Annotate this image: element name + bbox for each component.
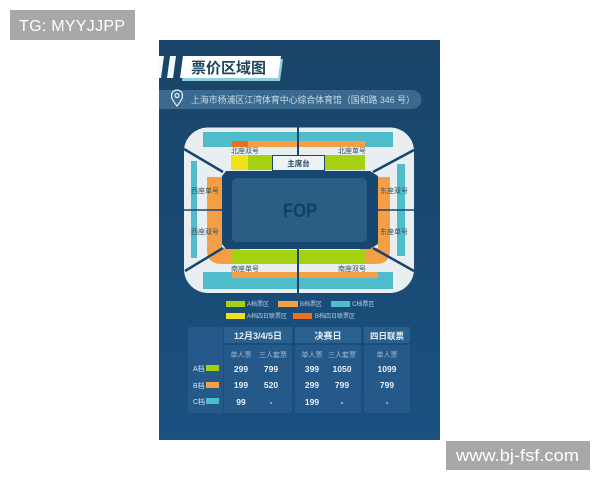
section labels: 西座双号 (191, 227, 219, 236)
legend: C档票区 (352, 300, 374, 308)
section labels: 西座单号 (191, 186, 219, 195)
main stand: 主席台 (287, 158, 310, 168)
column: tier labels (188, 327, 223, 413)
watermark: top left (10, 10, 135, 40)
zone: B tier north (248, 141, 365, 147)
column: 四日联票: 单人票 (376, 350, 398, 359)
column: 四日联票 (364, 327, 410, 413)
title banner: 票价区域图 (191, 60, 266, 77)
column: 12月3/4/5日: 12月3/4/5日 (234, 331, 282, 341)
column: 四日联票: - (386, 397, 389, 407)
zone: A tier north right (325, 155, 365, 170)
column: tier labels: B档 (193, 381, 205, 390)
column: 决赛日: 单人票 (302, 350, 322, 359)
column: 决赛日: 299 (305, 380, 319, 390)
column: 12月3/4/5日: 99 (236, 397, 246, 407)
price table (188, 327, 410, 413)
watermark: bottom right: www.bj-fsf.com (455, 446, 579, 465)
field of play (232, 178, 367, 242)
column: 决赛日: - (341, 397, 344, 407)
column: 四日联票: 四日联票 (370, 331, 404, 341)
inner bowl (222, 171, 378, 249)
legend: A档票区 (247, 300, 269, 308)
section labels: 东座单号 (380, 227, 408, 236)
title banner (159, 56, 283, 81)
legend: B档票区 (300, 300, 322, 308)
legend (226, 300, 374, 320)
zone: four-day A yellow (231, 155, 248, 170)
watermark: bottom right (446, 441, 590, 470)
section labels: 东座双号 (380, 186, 408, 195)
section labels: 南座双号 (338, 264, 366, 273)
column: 12月3/4/5日 (224, 327, 292, 413)
column: 12月3/4/5日: 520 (264, 380, 278, 390)
zone: C tier east (397, 164, 405, 256)
column: 12月3/4/5日: - (270, 397, 273, 407)
address bar (159, 90, 422, 109)
field of play: FOP (283, 201, 317, 222)
zone: B tier west and south-west (207, 177, 240, 264)
zone: B tier south (232, 272, 378, 278)
column: 决赛日: 三人套票 (328, 350, 356, 359)
legend: A档四日联票区 (247, 312, 287, 320)
section labels: 北座单号 (338, 146, 366, 155)
column: 决赛日: 1050 (333, 364, 352, 374)
zone: C tier west (191, 161, 197, 258)
column: 决赛日: 199 (305, 397, 319, 407)
column: 决赛日 (295, 327, 361, 413)
column: 12月3/4/5日: 单人票 (230, 350, 252, 359)
legend: B档四日联票区 (315, 312, 355, 320)
zone: B four-day north (232, 141, 248, 147)
address bar: 上海市杨浦区江湾体育中心综合体育馆（国和路 346 号） (191, 94, 415, 105)
zone: A tier south (232, 250, 365, 264)
seating map (184, 127, 414, 293)
column: 12月3/4/5日: 799 (264, 364, 278, 374)
arena floor (184, 128, 414, 293)
column: 四日联票: 799 (380, 380, 394, 390)
main stand (272, 156, 324, 170)
column: 决赛日: 399 (305, 364, 319, 374)
column: 12月3/4/5日: 199 (234, 380, 248, 390)
column: tier labels: C档 (193, 397, 205, 406)
watermark: top left: TG: MYYJJPP (19, 18, 125, 35)
zone: C tier south (203, 272, 393, 289)
dividers (184, 127, 414, 293)
column: 四日联票: 1099 (378, 364, 397, 374)
section labels: 北座双号 (231, 146, 259, 155)
column: 决赛日: 799 (335, 380, 349, 390)
poster background (159, 40, 440, 440)
section labels: 南座单号 (231, 264, 259, 273)
icon: location pin (172, 90, 182, 106)
zone: B tier east and south-east (360, 177, 390, 264)
zone: A tier north left (248, 155, 272, 170)
column: 决赛日: 决赛日 (314, 330, 342, 341)
column: tier labels: A档 (193, 364, 205, 373)
zone: C tier north (203, 132, 393, 147)
section labels (191, 146, 408, 273)
column: 12月3/4/5日: 299 (234, 364, 248, 374)
column: 12月3/4/5日: 三人套票 (259, 350, 287, 359)
